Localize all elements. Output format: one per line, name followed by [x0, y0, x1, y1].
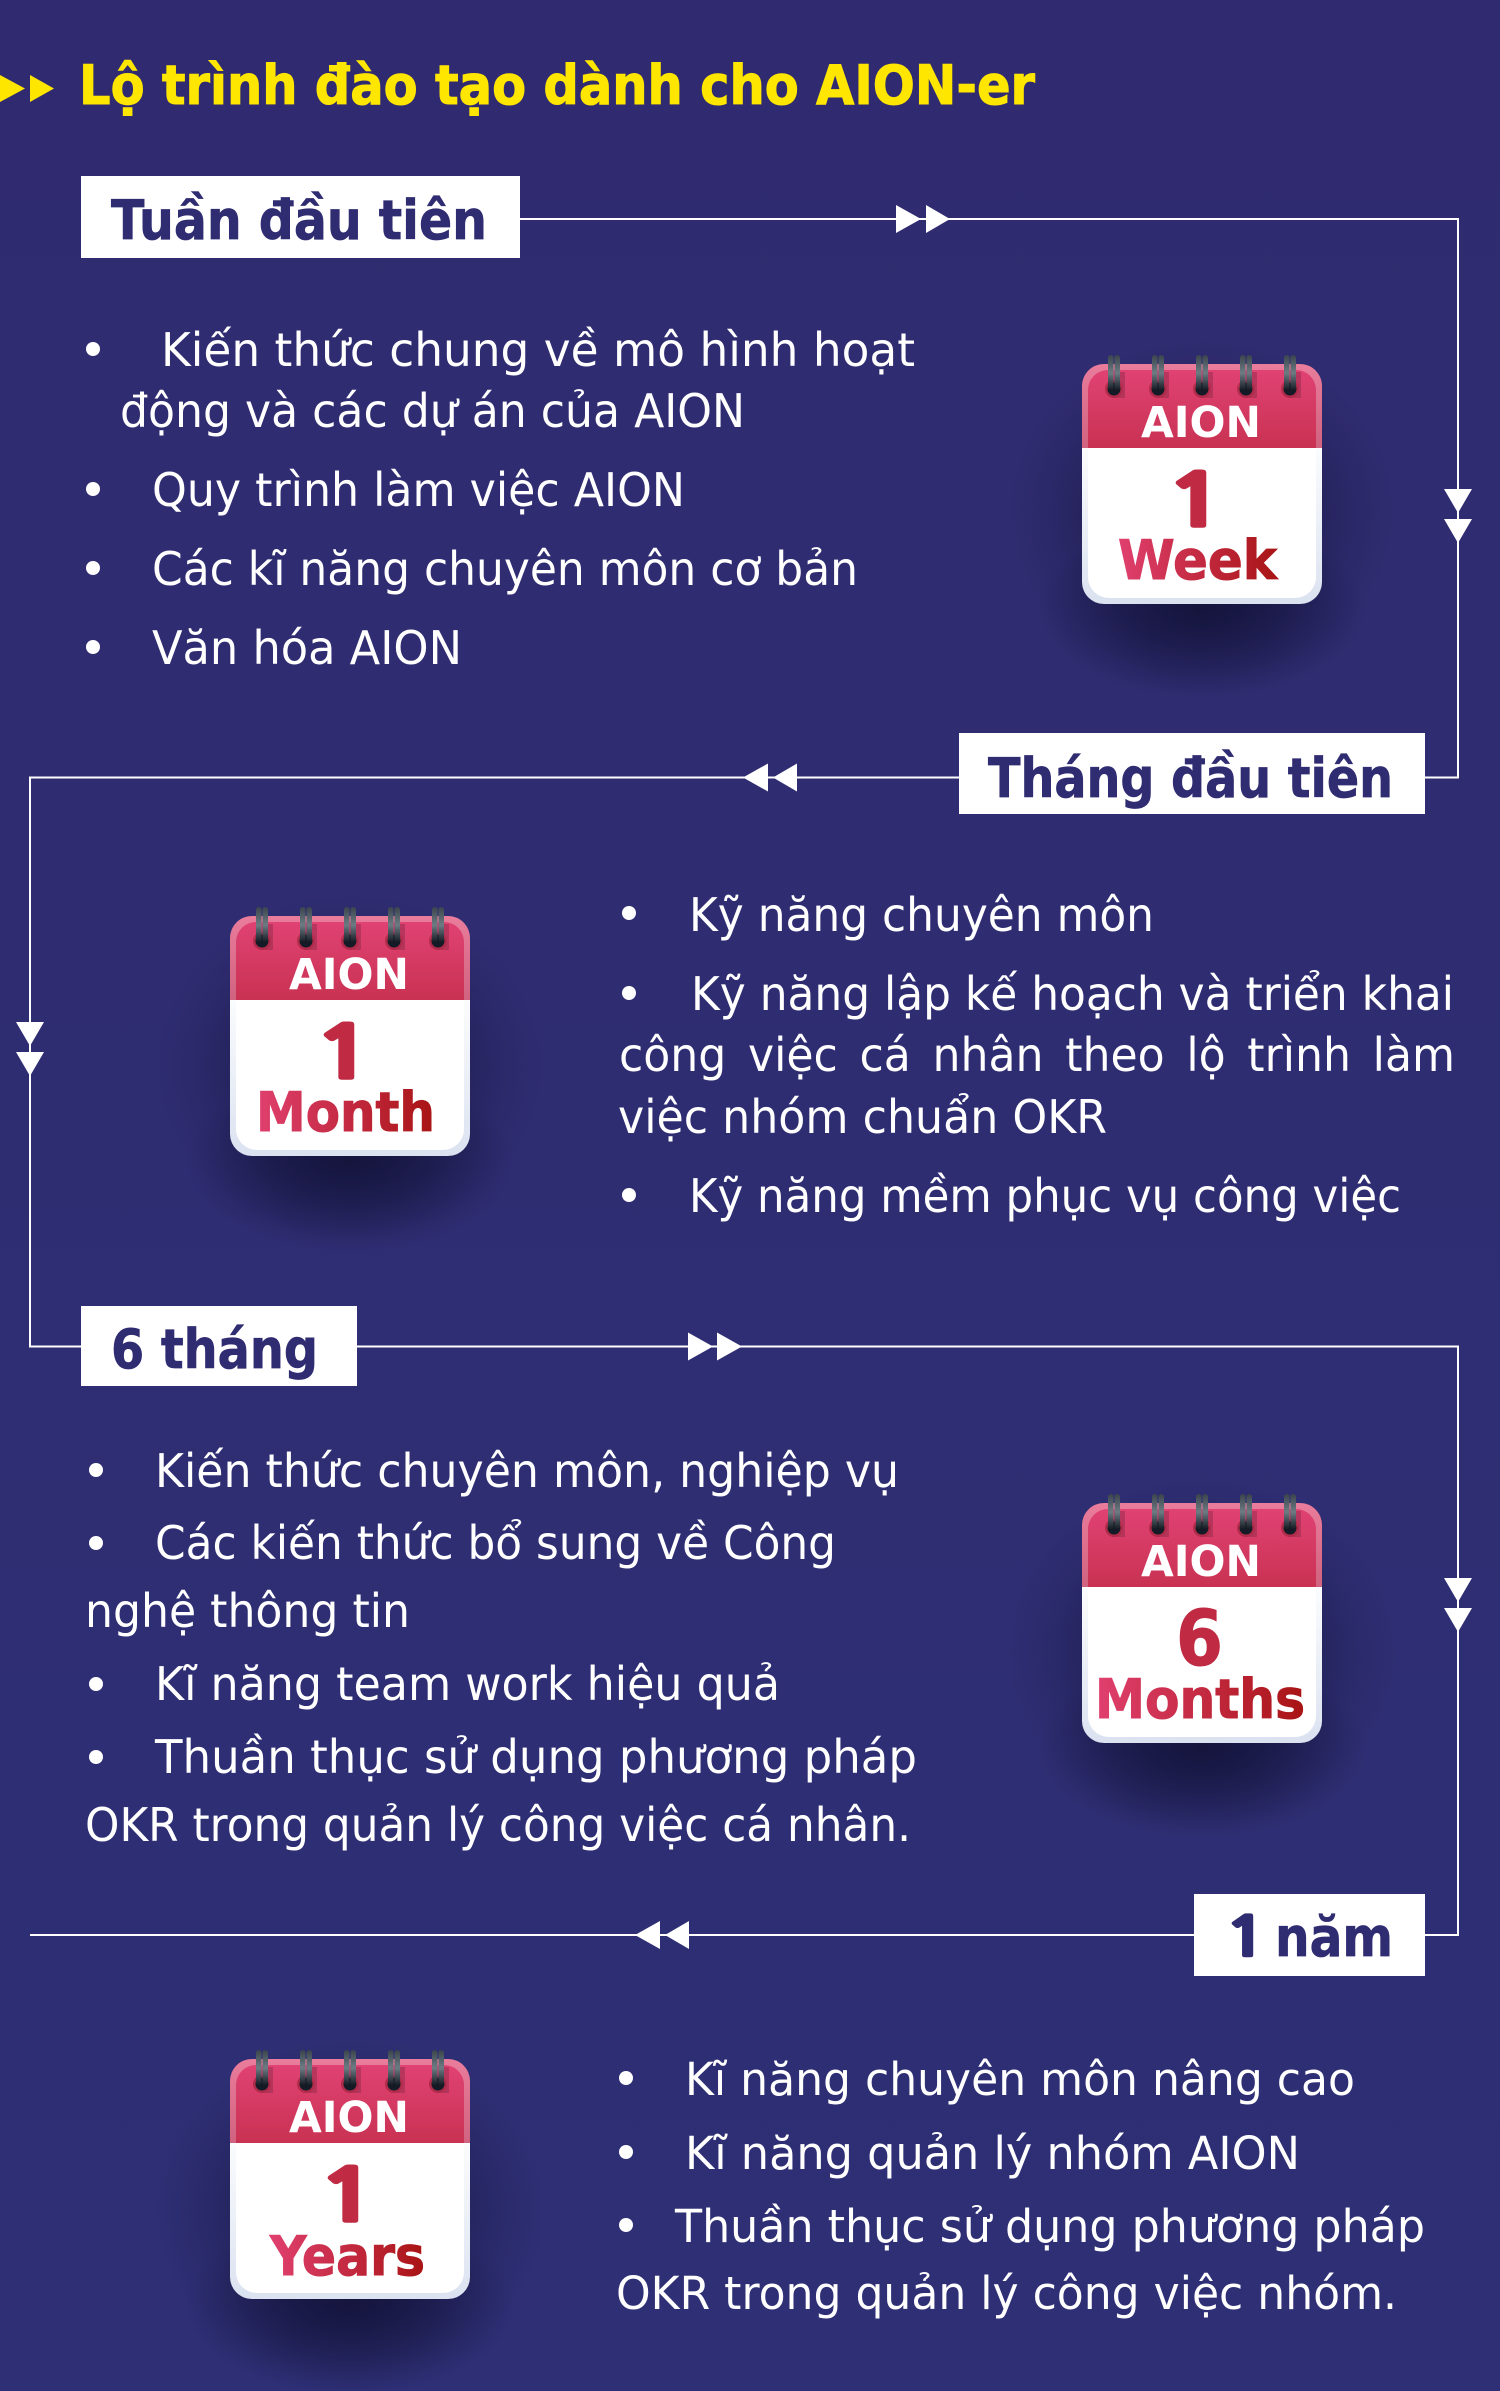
text block: six months: Các kiến thức bổ sung về Công	[155, 1516, 836, 1570]
calendar: 1 Years	[155, 2034, 545, 2391]
text block: one year: Kĩ năng quản lý nhóm AION	[685, 2127, 1300, 2180]
text block: one year	[616, 2053, 1425, 2320]
calendar: 6 Months: AION	[1141, 1537, 1261, 1587]
title	[0, 54, 1035, 117]
title text: Lộ trình đào tạo dành cho AION-er	[79, 54, 1035, 117]
arrow: year left	[635, 1921, 689, 1949]
text block: six months: Thuần thục sử dụng phương pháp	[154, 1730, 917, 1784]
text block: one year: Thuần thục sử dụng phương pháp	[674, 2200, 1425, 2253]
heading: Tuần đầu tiên: Tuần đầu tiên	[111, 189, 487, 252]
calendar: 1 Month: Month	[256, 1081, 435, 1144]
text block: first month: việc nhóm chuẩn OKR	[618, 1090, 1107, 1144]
arrow: six months down	[1444, 1578, 1472, 1632]
calendar: 6 Months	[1007, 1478, 1397, 1838]
text block: one year: OKR trong quản lý công việc nhóm.	[616, 2267, 1397, 2320]
text block: six months: Kĩ năng team work hiệu quả	[155, 1657, 780, 1711]
text block: first week: Kiến thức chung về mô hình hoạt	[161, 323, 915, 377]
text block: first week	[86, 323, 915, 675]
arrow: six months right	[688, 1332, 742, 1360]
heading: 1 năm: 1	[1224, 1912, 1268, 1965]
text block: one year: Kĩ năng chuyên môn nâng cao	[685, 2053, 1355, 2106]
heading: 1 năm: năm	[1275, 1906, 1393, 1969]
text block: first month: Kỹ năng chuyên môn	[689, 888, 1154, 942]
text block: first month: công việc cá nhân theo lộ trình làm	[619, 1028, 1455, 1082]
text block: first week: Các kĩ năng chuyên môn cơ bản	[152, 542, 858, 596]
calendar: 1 Years: AION	[289, 2093, 409, 2143]
arrow: month down	[16, 1022, 44, 1076]
calendar: 1 Years: 1	[317, 2160, 379, 2232]
calendar: 1 Month: AION	[289, 950, 409, 1000]
text block: six months: nghệ thông tin	[85, 1584, 410, 1638]
heading: 1 năm	[1194, 1894, 1425, 1976]
heading: 6 tháng	[81, 1306, 357, 1386]
text block: six months: Kiến thức chuyên môn, nghiệp vụ	[155, 1444, 899, 1498]
text block: six months: OKR trong quản lý công việc cá nhân.	[85, 1798, 911, 1852]
calendar: 1 Week	[1007, 339, 1397, 699]
text block: first week: Văn hóa AION	[152, 621, 462, 675]
connector: timeline path	[30, 219, 1458, 1935]
text block: first month: Kỹ năng mềm phục vụ công việc	[689, 1169, 1401, 1223]
heading: Tháng đầu tiên: Tháng đầu tiên	[988, 747, 1393, 810]
arrow: week right	[896, 205, 950, 233]
text block: first week: Quy trình làm việc AION	[152, 463, 685, 517]
calendar: 1 Years: Years	[269, 2225, 425, 2288]
calendar: 1 Month: 1	[313, 1017, 375, 1089]
calendar: 1 Week: Week	[1118, 529, 1278, 592]
arrow: month left	[743, 764, 797, 792]
text block: first week: động và các dự án của AION	[120, 384, 745, 438]
calendar: 1 Week: AION	[1141, 398, 1261, 448]
text block: first month: Kỹ năng lập kế hoạch và triển khai	[691, 967, 1454, 1021]
text block: first month	[618, 888, 1455, 1223]
text block: six months	[85, 1444, 917, 1852]
calendar: 6 Months: 6	[1176, 1595, 1223, 1684]
arrow: week down	[1444, 489, 1472, 543]
heading: 6 tháng: 6 tháng	[111, 1318, 318, 1381]
calendar: 1 Month	[155, 891, 545, 1251]
calendar: 1 Week: 1	[1165, 465, 1227, 537]
calendar: 6 Months: Months	[1095, 1668, 1305, 1731]
icon: title double arrow	[0, 75, 54, 102]
